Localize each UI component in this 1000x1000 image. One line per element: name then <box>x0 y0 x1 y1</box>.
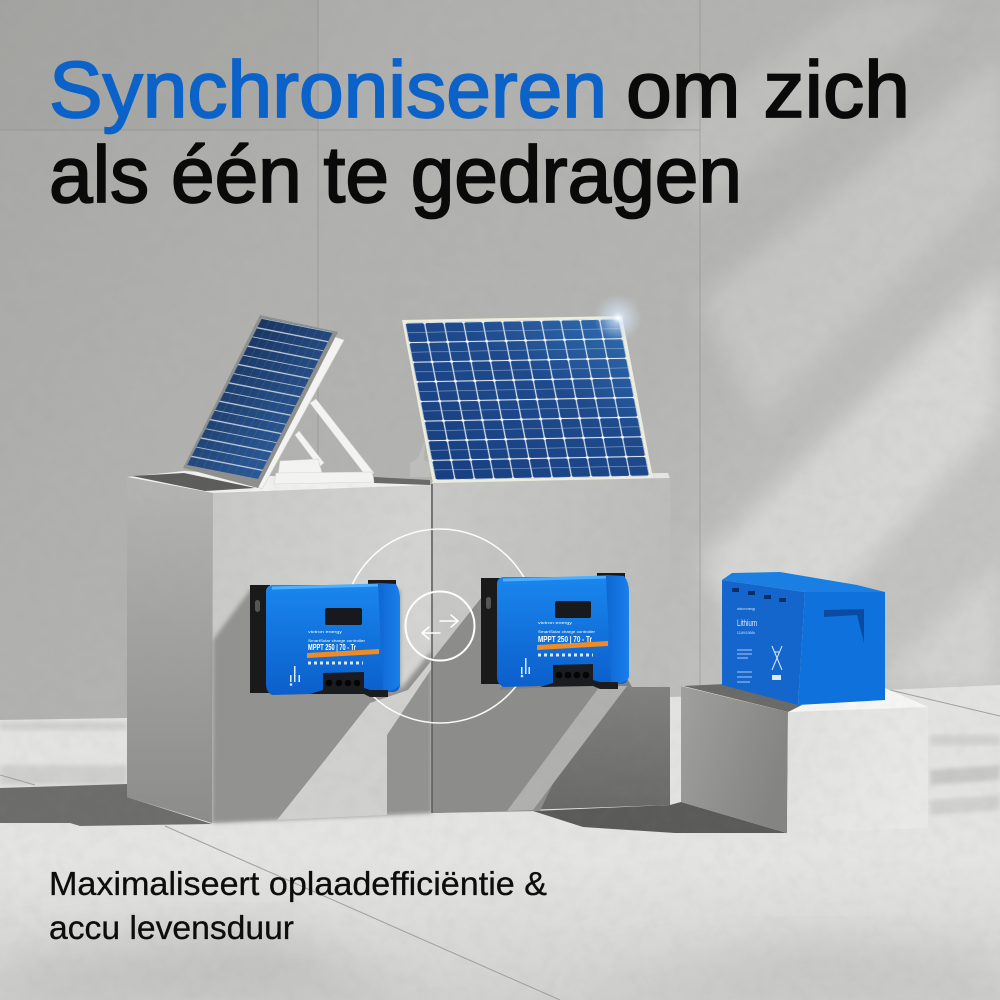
title: om zich <box>626 45 910 134</box>
orange stripe and label: SmartSolar charge controller <box>308 638 366 643</box>
status LEDs <box>521 658 530 677</box>
mounting bracket <box>250 585 270 693</box>
orange stripe and label: MPPT 250 | 70 - Tr <box>308 643 356 652</box>
subtitle text <box>49 865 547 946</box>
mounting bracket <box>481 578 501 684</box>
subtitle text: accu levensduur <box>49 909 294 946</box>
right concrete block <box>432 473 670 813</box>
lithium battery: Lithium <box>737 618 757 628</box>
title: Synchroniseren <box>49 45 607 134</box>
light flare <box>594 294 642 342</box>
orange stripe and label: victron energy <box>308 629 342 634</box>
left concrete block <box>127 471 432 823</box>
floor shadow left <box>0 784 212 826</box>
orange stripe and label <box>537 620 608 655</box>
title <box>49 45 910 219</box>
light stripe <box>277 660 432 820</box>
orange stripe and label: victron energy <box>538 620 572 625</box>
left charge controller <box>250 580 400 697</box>
small solar panel with stand <box>183 315 374 489</box>
large solar panel <box>402 316 653 483</box>
orange stripe and label: SmartSolar charge controller <box>538 629 596 634</box>
right charge controller <box>481 573 629 689</box>
floor shadow right <box>533 802 787 833</box>
orange stripe and label <box>307 629 379 663</box>
lithium battery: victron energy <box>737 606 755 611</box>
status LEDs <box>290 666 300 686</box>
sync icon: inner ring with two arrows <box>406 592 474 660</box>
stand <box>254 337 374 489</box>
lithium battery: 12,8V/100Ah <box>737 630 755 635</box>
sync ring <box>343 529 537 723</box>
connector block <box>540 664 618 689</box>
orange stripe and label: MPPT 250 | 70 - Tr <box>538 635 592 644</box>
lithium battery <box>722 572 885 705</box>
block shade below controller <box>212 590 432 823</box>
shadow on top face <box>132 473 255 491</box>
title: als één te gedragen <box>49 130 742 219</box>
battery concrete block <box>681 684 928 833</box>
connector block <box>310 672 388 697</box>
concrete wall background <box>0 0 1000 730</box>
subtitle text: Maximaliseert oplaadefficiëntie & <box>49 865 547 902</box>
floor <box>0 685 1000 1000</box>
